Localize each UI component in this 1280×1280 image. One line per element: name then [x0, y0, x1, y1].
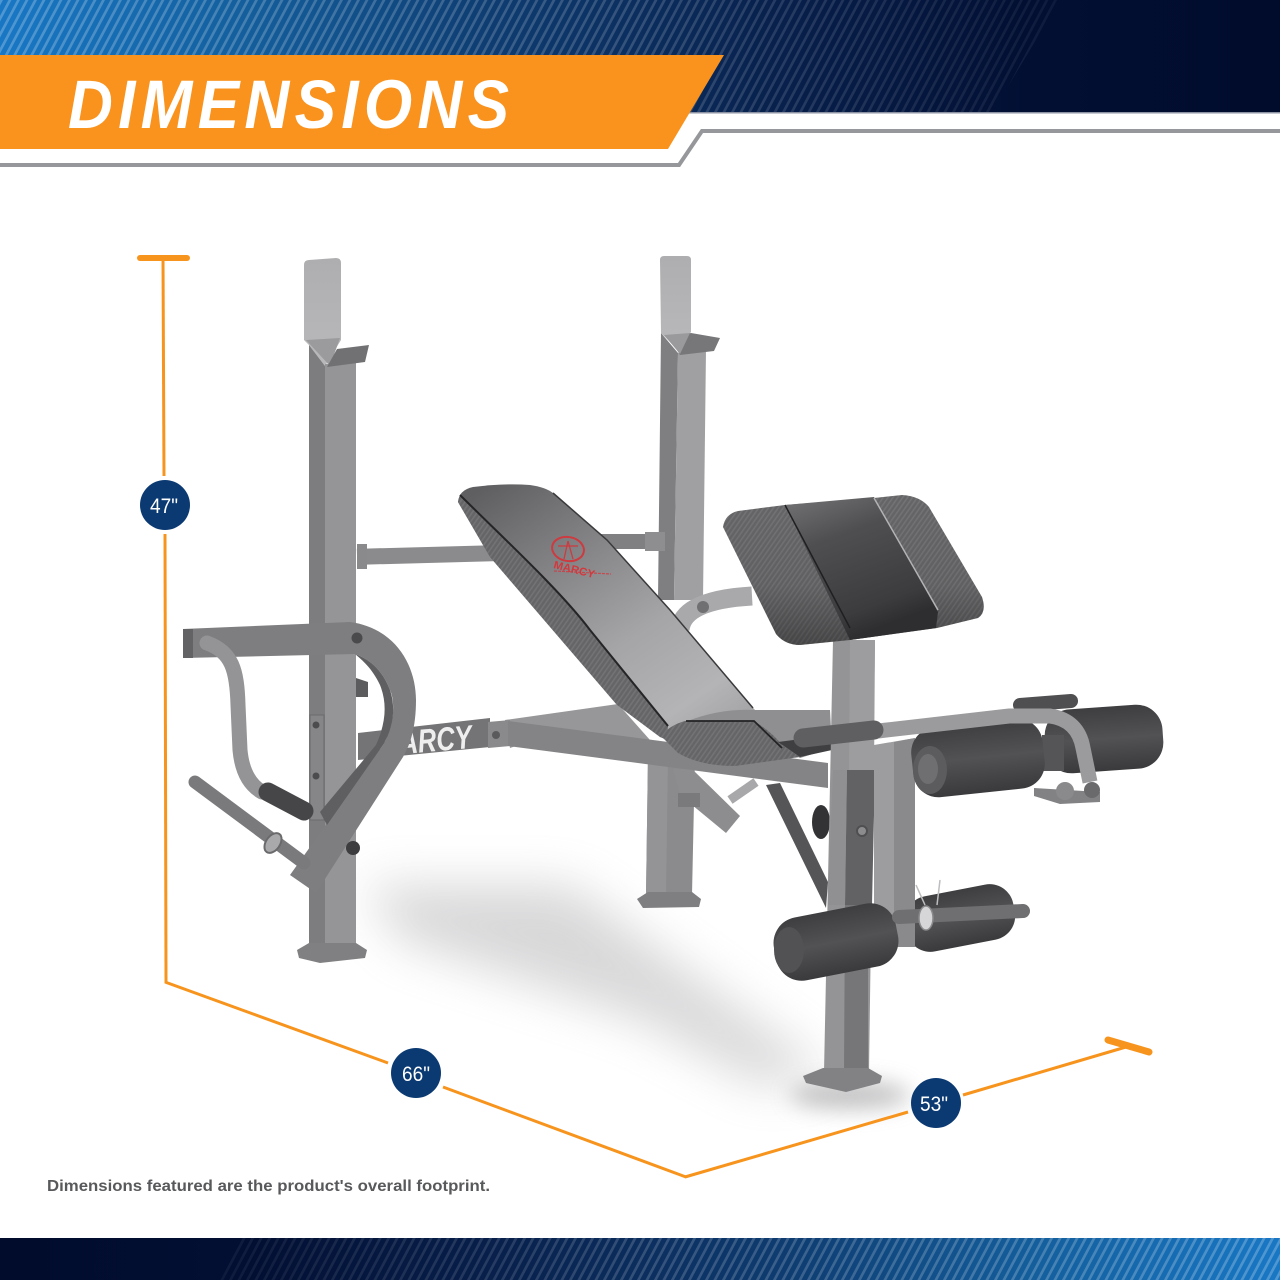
seat pad — [661, 710, 832, 766]
incline bracket — [673, 768, 756, 833]
footnote: Dimensions featured are the product's overall footprint. — [47, 1178, 490, 1195]
badge 53 inches: 53" — [920, 1093, 948, 1116]
front frame rail — [508, 721, 828, 788]
Marcy pad logo: MARCY — [552, 559, 597, 581]
lower peg and clip — [899, 880, 1023, 930]
curved preacher brace — [680, 596, 752, 630]
weight bench — [183, 256, 1165, 1092]
rear right upright — [637, 256, 720, 908]
footer band — [0, 1238, 1280, 1280]
rear leg roller — [1043, 703, 1165, 775]
Marcy pad logo — [550, 534, 611, 581]
adjustment knob — [812, 805, 830, 839]
incline backrest pad — [458, 484, 755, 740]
left weight arm — [183, 622, 416, 893]
arm curved rod — [207, 643, 262, 792]
depth dimension line — [685, 1040, 1149, 1177]
badge 47 inches — [140, 480, 190, 530]
leg roller bracket — [1042, 735, 1064, 771]
width dimension line — [165, 982, 686, 1177]
brace bolt — [697, 601, 709, 613]
second post — [874, 738, 915, 947]
arm foam pad — [268, 792, 304, 811]
title: DIMENSIONS — [68, 66, 509, 143]
rear horizontal bar — [357, 532, 665, 569]
preacher curl pad — [723, 495, 984, 645]
gray underline stroke — [0, 131, 1280, 165]
front leg roller — [909, 716, 1047, 800]
front post — [803, 640, 882, 1092]
badge 66 inches — [391, 1048, 441, 1098]
lower front roller — [769, 899, 903, 985]
badge 47 inches: 47" — [150, 495, 178, 518]
front left upright — [297, 258, 369, 963]
floor shadow — [365, 885, 910, 1109]
lower weight peg — [195, 782, 360, 863]
cross bar with MARCY logo: MARCY — [376, 718, 476, 763]
badge 66 inches: 66" — [402, 1063, 430, 1086]
rear frame rail — [505, 704, 650, 748]
leg developer arm — [803, 716, 1100, 804]
rear lower roller — [901, 880, 1019, 956]
header band — [0, 0, 1280, 114]
height dimension line — [140, 258, 187, 983]
badge 53 inches — [911, 1078, 961, 1128]
dark diagonal strut — [766, 783, 828, 908]
orange title banner — [0, 55, 724, 149]
rear upper handle — [1020, 701, 1071, 705]
